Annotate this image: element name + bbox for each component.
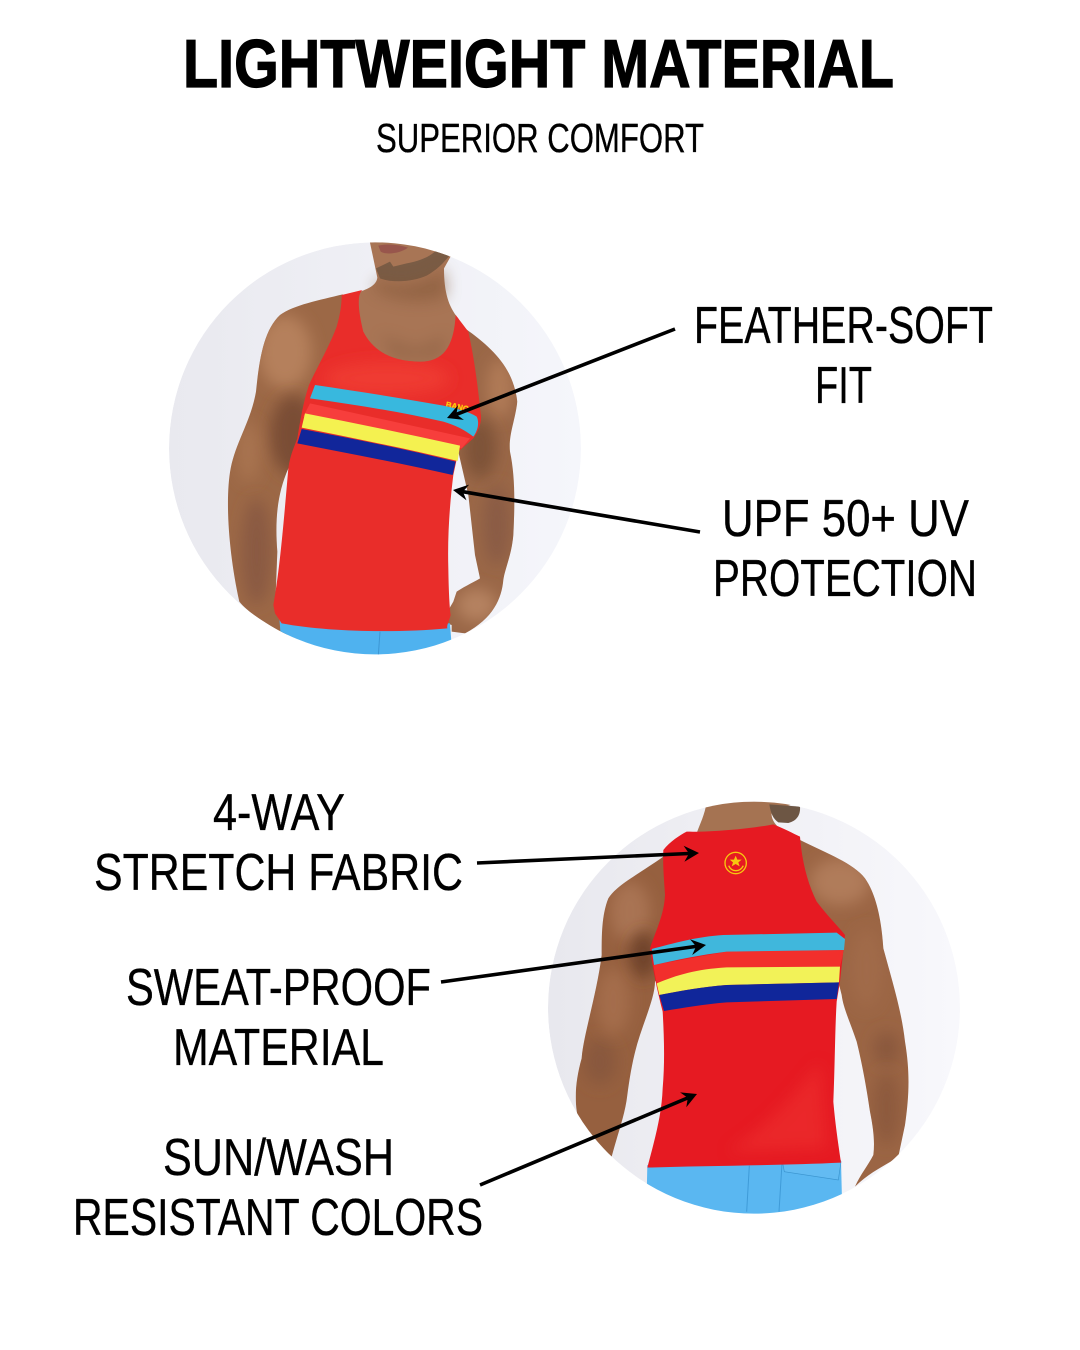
label: feather-soft fit: FEATHER-SOFT [694, 297, 993, 355]
label: sweat-proof: SWEAT-PROOF [126, 959, 431, 1017]
shorts pocket flap [782, 1161, 841, 1180]
label: sun/wash resistant: RESISTANT COLORS [73, 1189, 483, 1247]
neck [697, 802, 800, 833]
label: UPF protection: UPF 50+ UV [722, 490, 969, 548]
shorts [646, 1160, 842, 1214]
label: feather-soft fit [694, 297, 993, 415]
arrow: sweat-proof [441, 939, 706, 982]
arrow: feather-soft fit [447, 329, 675, 420]
subtitle: SUPERIOR COMFORT [376, 115, 704, 161]
stripe: yellow [657, 967, 840, 995]
right arm and hand [448, 330, 518, 634]
shorts [280, 620, 452, 654]
stripe: yellow [302, 413, 460, 461]
logo badge [725, 852, 746, 874]
label: sun/wash resistant: SUN/WASH [163, 1129, 394, 1187]
tank top [640, 822, 853, 1172]
photo: front of tank top [169, 235, 581, 668]
logo text: BANG [445, 400, 470, 414]
arrow: 4-way stretch [477, 846, 699, 863]
stripe: cyan [652, 933, 845, 965]
label: 4-way stretch: STRETCH FABRIC [94, 844, 463, 902]
label: UPF protection: PROTECTION [713, 550, 977, 608]
arrow: sun/wash resistant [480, 1092, 697, 1185]
stripe: cyan [310, 385, 478, 437]
label: sweat-proof: MATERIAL [173, 1019, 384, 1077]
photo: back of tank top [548, 802, 960, 1228]
neck and face [358, 242, 458, 362]
label: feather-soft fit: FIT [815, 357, 872, 415]
left arm [228, 294, 343, 635]
arrow: UPF protection [453, 485, 700, 532]
title: LIGHTWEIGHT MATERIAL [183, 26, 894, 102]
label: UPF protection [713, 490, 977, 608]
label: 4-way stretch [94, 784, 463, 902]
stripe: navy [297, 429, 456, 475]
label: 4-way stretch: 4-WAY [213, 784, 345, 842]
stripe: navy [659, 982, 839, 1011]
label: sun/wash resistant [73, 1129, 483, 1247]
left arm [576, 856, 665, 1156]
label: sweat-proof [126, 959, 431, 1077]
tank top [267, 285, 487, 638]
right arm and hand [800, 840, 908, 1186]
